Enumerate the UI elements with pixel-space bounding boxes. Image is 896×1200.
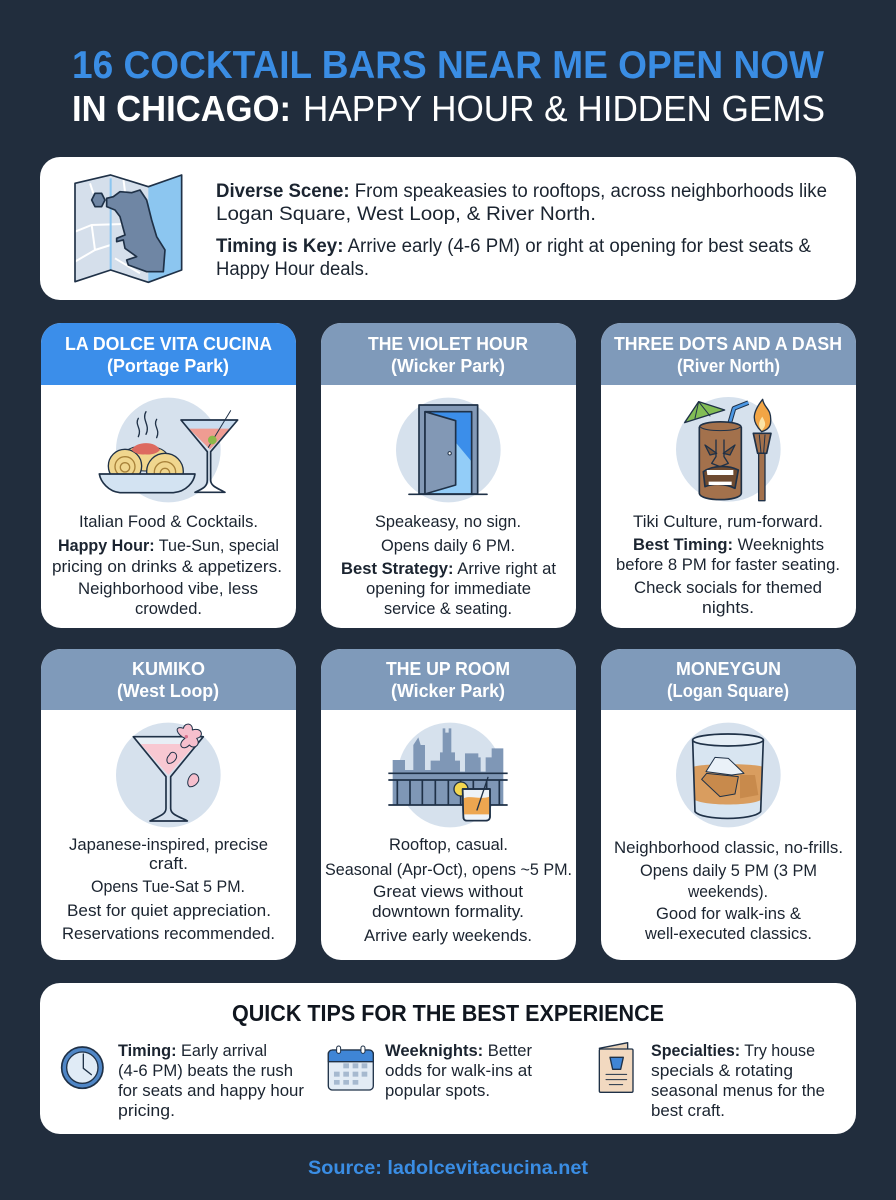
body text: nights.	[702, 599, 754, 617]
tip: specialties: best craft.	[651, 1102, 725, 1120]
body text	[62, 836, 275, 943]
body text: Neighborhood classic, no-frills.	[614, 839, 843, 857]
body text: Speakeasy, no sign.	[375, 513, 521, 531]
body text: weekends).	[687, 883, 768, 901]
heading	[386, 658, 510, 701]
body text: pricing on drinks & appetizers.	[52, 558, 282, 576]
icon: old fashioned glass	[676, 723, 781, 827]
icon: pasta and cocktail	[99, 398, 238, 502]
body text	[614, 839, 843, 943]
heading: (Portage Park)	[107, 355, 229, 376]
tip: specialties	[651, 1042, 825, 1120]
tip: timing: Timing: Early arrival	[118, 1042, 267, 1060]
text: intro lines: Logan Square, West Loop, & River North.	[216, 204, 596, 225]
heading: KUMIKO	[132, 658, 205, 679]
body text: Check socials for themed	[634, 579, 822, 597]
body text: Best for quiet appreciation.	[67, 902, 271, 920]
body text: Italian Food & Cocktails.	[79, 513, 258, 531]
title: IN CHICAGO:	[72, 88, 291, 129]
panel: quick tips	[40, 983, 856, 1134]
body text: Opens daily 6 PM.	[381, 537, 515, 555]
heading: THREE DOTS AND A DASH	[614, 333, 842, 354]
body text: Reservations recommended.	[62, 925, 275, 943]
panel: La Dolce Vita Cucina	[41, 323, 296, 628]
icon: rooftop skyline and drink	[388, 723, 508, 827]
title	[72, 44, 825, 129]
panel: Three Dots and a Dash	[601, 323, 856, 628]
body text: before 8 PM for faster seating.	[616, 556, 840, 574]
body text: Great views without	[373, 883, 523, 901]
panel: intro	[40, 157, 856, 300]
tip: timing: (4-6 PM) beats the rush	[118, 1062, 293, 1080]
body text	[341, 513, 556, 618]
text: intro lines	[216, 181, 827, 280]
heading	[65, 333, 272, 376]
title: 16 COCKTAIL BARS NEAR ME OPEN NOW	[72, 44, 824, 87]
body text: downtown formality.	[372, 903, 524, 921]
text: intro lines: Timing is Key: Arrive early (4-6 PM) or right at opening for best seats &	[216, 236, 811, 257]
icon: Chicago map	[75, 175, 182, 282]
icon: calendar	[328, 1046, 373, 1090]
icon: tiki mug and torch	[676, 397, 781, 502]
tip: weeknights: odds for walk-ins at	[385, 1062, 532, 1080]
icon: menu	[599, 1043, 633, 1092]
source: Source: ladolcevitacucina.net	[308, 1158, 589, 1179]
body text: Arrive early weekends.	[364, 927, 532, 945]
tip: timing: for seats and happy hour	[118, 1082, 305, 1100]
title: HAPPY HOUR & HIDDEN GEMS	[303, 88, 825, 129]
heading: (River North)	[677, 355, 780, 376]
panel: The Violet Hour	[321, 323, 576, 628]
heading: MONEYGUN	[676, 658, 781, 679]
body text: Japanese-inspired, precise	[69, 836, 268, 854]
body text	[616, 513, 840, 617]
tip: timing: pricing.	[118, 1102, 175, 1120]
body text: well-executed classics.	[644, 925, 812, 943]
body text: Good for walk-ins &	[656, 905, 801, 923]
heading	[667, 658, 789, 701]
heading: (Wicker Park)	[391, 680, 505, 701]
panel: Moneygun	[601, 649, 856, 960]
body text: craft.	[149, 855, 188, 873]
heading	[368, 333, 528, 376]
tip: weeknights: popular spots.	[385, 1082, 490, 1100]
heading	[117, 658, 219, 701]
tip: specialties: Specialties: Try house	[651, 1042, 815, 1060]
body text: Opens Tue-Sat 5 PM.	[91, 878, 245, 896]
text: intro lines: Happy Hour deals.	[216, 259, 369, 280]
icon: open door	[396, 398, 501, 502]
body text: Seasonal (Apr-Oct), opens ~5 PM.	[325, 861, 572, 879]
heading: (Logan Square)	[667, 680, 789, 701]
text: intro lines: Diverse Scene: From speakeasies to rooftops, across neighborhoods like	[216, 181, 827, 202]
icon: cherry blossom martini	[116, 723, 221, 827]
tip: weeknights	[385, 1042, 533, 1100]
body text: crowded.	[135, 600, 202, 618]
body text: opening for immediate	[366, 580, 531, 598]
heading: THE VIOLET HOUR	[368, 333, 528, 354]
heading: THE UP ROOM	[386, 658, 510, 679]
tip: timing	[118, 1042, 305, 1120]
body text: Best Timing: Weeknights	[633, 536, 824, 554]
body text	[52, 513, 282, 618]
body text: Rooftop, casual.	[389, 836, 508, 854]
body text: Happy Hour: Tue-Sun, special	[58, 537, 279, 555]
body text: Best Strategy: Arrive right at	[341, 560, 556, 578]
panel: Kumiko	[41, 649, 296, 960]
body text: Neighborhood vibe, less	[78, 580, 258, 598]
tip: weeknights: Weeknights: Better	[385, 1042, 533, 1060]
tip: specialties: seasonal menus for the	[651, 1082, 825, 1100]
tip: specialties: specials & rotating	[651, 1062, 793, 1080]
heading: QUICK TIPS FOR THE BEST EXPERIENCE	[232, 1000, 664, 1026]
body text: Opens daily 5 PM (3 PM	[640, 862, 817, 880]
body text: Tiki Culture, rum-forward.	[633, 513, 823, 531]
heading: (West Loop)	[117, 680, 219, 701]
heading: (Wicker Park)	[391, 355, 505, 376]
heading: LA DOLCE VITA CUCINA	[65, 333, 272, 354]
body text: service & seating.	[384, 600, 512, 618]
icon: clock	[62, 1047, 103, 1088]
body text	[325, 836, 572, 945]
panel: The Up Room	[321, 649, 576, 960]
heading	[614, 333, 842, 376]
